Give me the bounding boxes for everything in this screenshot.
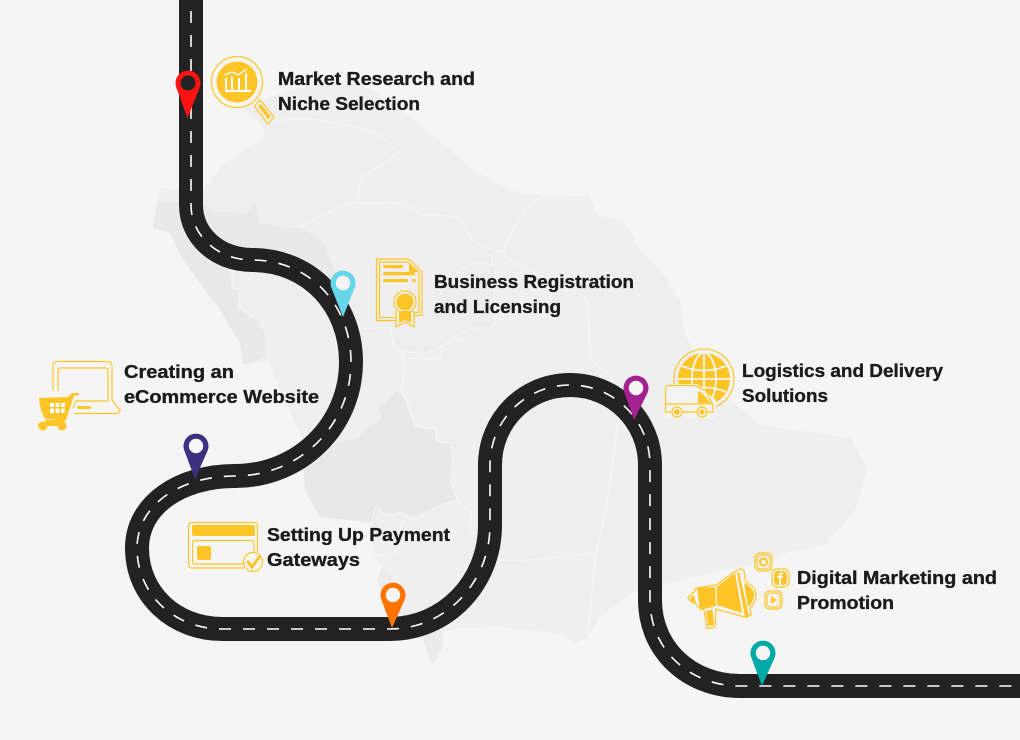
label: Business Registration and Licensing <box>434 271 634 317</box>
darker central region <box>303 390 458 523</box>
icon: globe and delivery truck <box>664 349 734 418</box>
label: Setting Up Payment Gateways: Setting Up Payment <box>267 524 450 545</box>
label: Logistics and Delivery Solutions: Logistics and Delivery <box>742 360 944 381</box>
icon: certificate document <box>376 259 422 327</box>
background map <box>153 80 868 665</box>
label: Setting Up Payment Gateways <box>267 524 450 570</box>
label: Digital Marketing and Promotion: Digital Marketing and <box>797 567 997 588</box>
label: Market Research and Niche Selection <box>278 68 475 114</box>
icon: payment card with check <box>188 522 262 572</box>
pin: red <box>176 71 200 118</box>
region border lines <box>232 119 618 635</box>
icon: magnifier with chart <box>212 56 274 124</box>
label: Digital Marketing and Promotion <box>797 567 997 613</box>
icon: megaphone and social media <box>688 553 789 628</box>
pin: teal <box>750 641 776 686</box>
pin: purple <box>623 376 648 420</box>
darker southern peninsula <box>377 567 443 665</box>
pin: light blue <box>330 271 356 317</box>
icon: laptop and shopping cart <box>38 362 120 430</box>
label: Logistics and Delivery Solutions <box>742 360 944 406</box>
pin: navy <box>184 434 208 479</box>
label: Creating an eCommerce Website: eCommerce Website <box>124 386 319 407</box>
pin: orange <box>381 583 405 628</box>
label: Digital Marketing and Promotion: Promotion <box>797 592 894 613</box>
label: Creating an eCommerce Website <box>124 361 319 407</box>
label: Market Research and Niche Selection: Niche Selection <box>278 93 420 114</box>
icon: play <box>765 591 782 609</box>
label: Setting Up Payment Gateways: Gateways <box>267 549 360 570</box>
label: Business Registration and Licensing: Business Registration <box>434 271 634 292</box>
slightly darker licensing region <box>390 243 495 353</box>
label: Business Registration and Licensing: and Licensing <box>434 296 561 317</box>
label: Creating an eCommerce Website: Creating an <box>124 361 234 382</box>
icon: facebook <box>772 569 789 587</box>
darker western region <box>153 202 340 365</box>
icon: instagram <box>755 553 772 571</box>
label: Market Research and Niche Selection: Market Research and <box>278 68 475 89</box>
label: Logistics and Delivery Solutions: Solutions <box>742 385 828 406</box>
